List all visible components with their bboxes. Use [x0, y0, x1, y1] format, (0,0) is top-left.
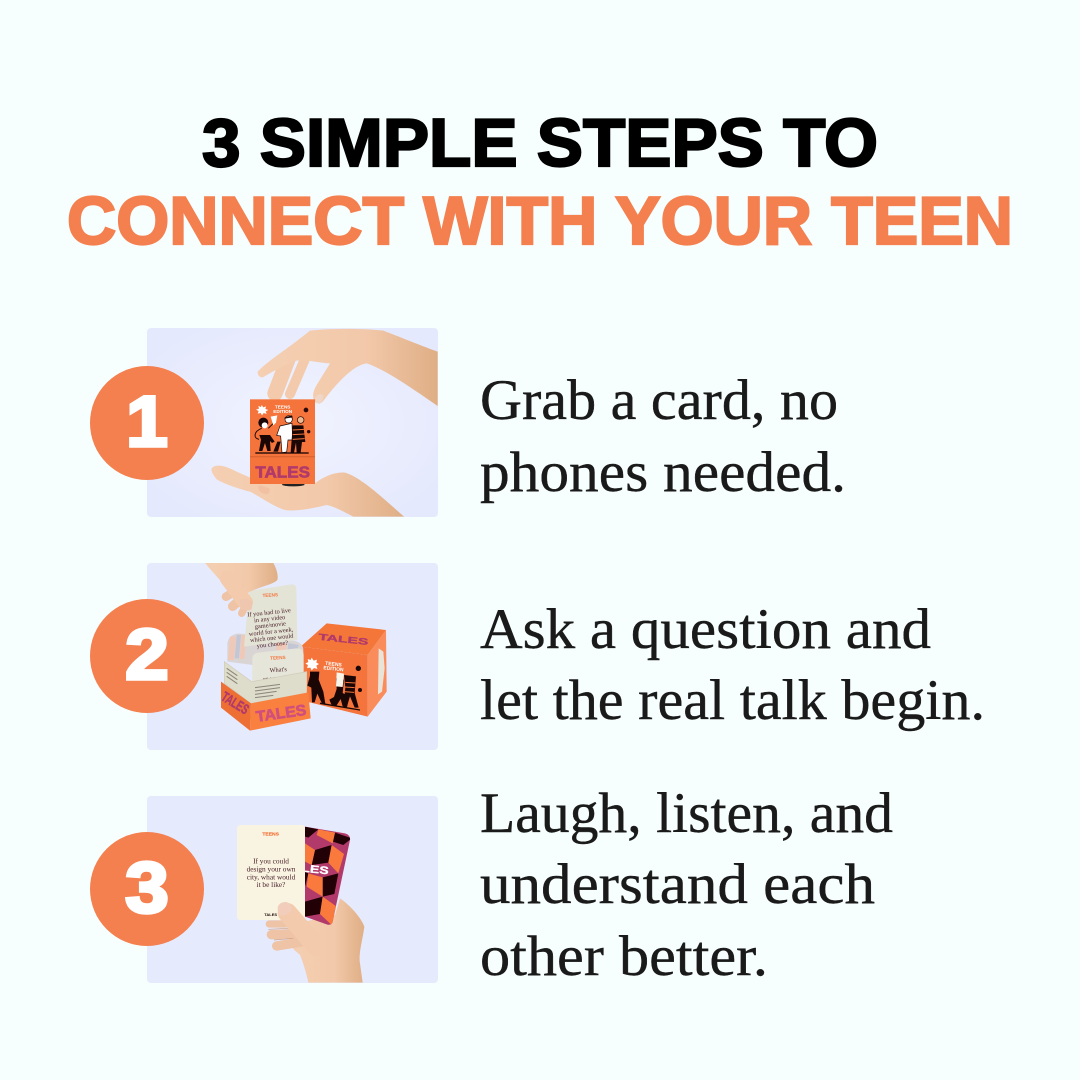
step 3 image panel — [147, 796, 438, 983]
closed product box: TALES — [318, 632, 369, 647]
icon: upper hand — [258, 329, 438, 406]
stack of cards — [227, 633, 303, 672]
step 1 image panel — [147, 328, 438, 517]
step 3 text — [480, 782, 893, 988]
title: 3 SIMPLE STEPS TO — [202, 105, 878, 181]
held card: world for a week, — [249, 626, 294, 638]
question card: TALES — [264, 912, 277, 917]
step 3 text: understand each — [480, 853, 875, 916]
title — [67, 105, 1013, 259]
back of card with cube pattern: LES — [301, 863, 329, 877]
step 2 text — [480, 598, 985, 732]
question card: design your own — [247, 864, 296, 873]
held card: game/movie — [254, 620, 286, 631]
question card — [237, 825, 305, 920]
closed product box: TEENS — [325, 661, 343, 669]
hand palm and fingers — [268, 898, 364, 983]
step 2 text: Ask a question and — [480, 598, 931, 661]
illustration: figures — [255, 415, 309, 454]
question card: If you could — [253, 856, 289, 865]
open box base: TALES — [219, 688, 252, 717]
step 1 text: Grab a card, no — [480, 369, 838, 432]
step 2 number badge — [90, 599, 204, 713]
front card: TEENS — [270, 655, 286, 661]
front card — [252, 648, 304, 695]
product box: TEENS — [275, 404, 290, 409]
held card: which one would — [250, 633, 295, 644]
held card: you choose? — [256, 640, 289, 650]
step 2 text: let the real talk begin. — [480, 669, 985, 732]
step 2 number badge: 2 — [125, 614, 169, 694]
step 2 image panel — [147, 563, 438, 750]
held card: in any video — [254, 614, 286, 624]
question card: TEENS — [262, 831, 280, 837]
product box — [250, 399, 315, 484]
product box: TALES — [255, 464, 310, 481]
back of card with cube pattern — [305, 826, 350, 925]
thumb — [278, 902, 317, 947]
open box base — [219, 682, 311, 731]
front card: What's — [269, 666, 288, 674]
question card: city, what would — [247, 872, 296, 881]
hand holding card — [205, 563, 278, 613]
icon: lower hand — [211, 466, 404, 517]
title: CONNECT WITH YOUR TEEN — [67, 183, 1013, 259]
closed product box: EDITION — [323, 665, 344, 673]
closed product box — [301, 623, 387, 717]
step 1 text — [480, 369, 846, 504]
step 1 number badge: 1 — [126, 383, 168, 462]
held card: TEENS — [262, 592, 278, 598]
step 3 number badge: 3 — [125, 847, 169, 927]
open box base: TALES — [255, 702, 307, 726]
card sleeve — [224, 662, 307, 703]
question card: it be like? — [257, 880, 285, 889]
step 3 number badge — [90, 832, 204, 946]
step 3 text: other better. — [480, 925, 768, 988]
step 3 text: Laugh, listen, and — [480, 782, 893, 845]
held card — [244, 584, 297, 651]
front card: on your mind — [263, 675, 294, 683]
held card: If you had to live — [247, 607, 291, 619]
step 1 text: phones needed. — [480, 441, 846, 504]
step 1 number badge — [90, 366, 204, 480]
product box: EDITION — [273, 409, 293, 414]
